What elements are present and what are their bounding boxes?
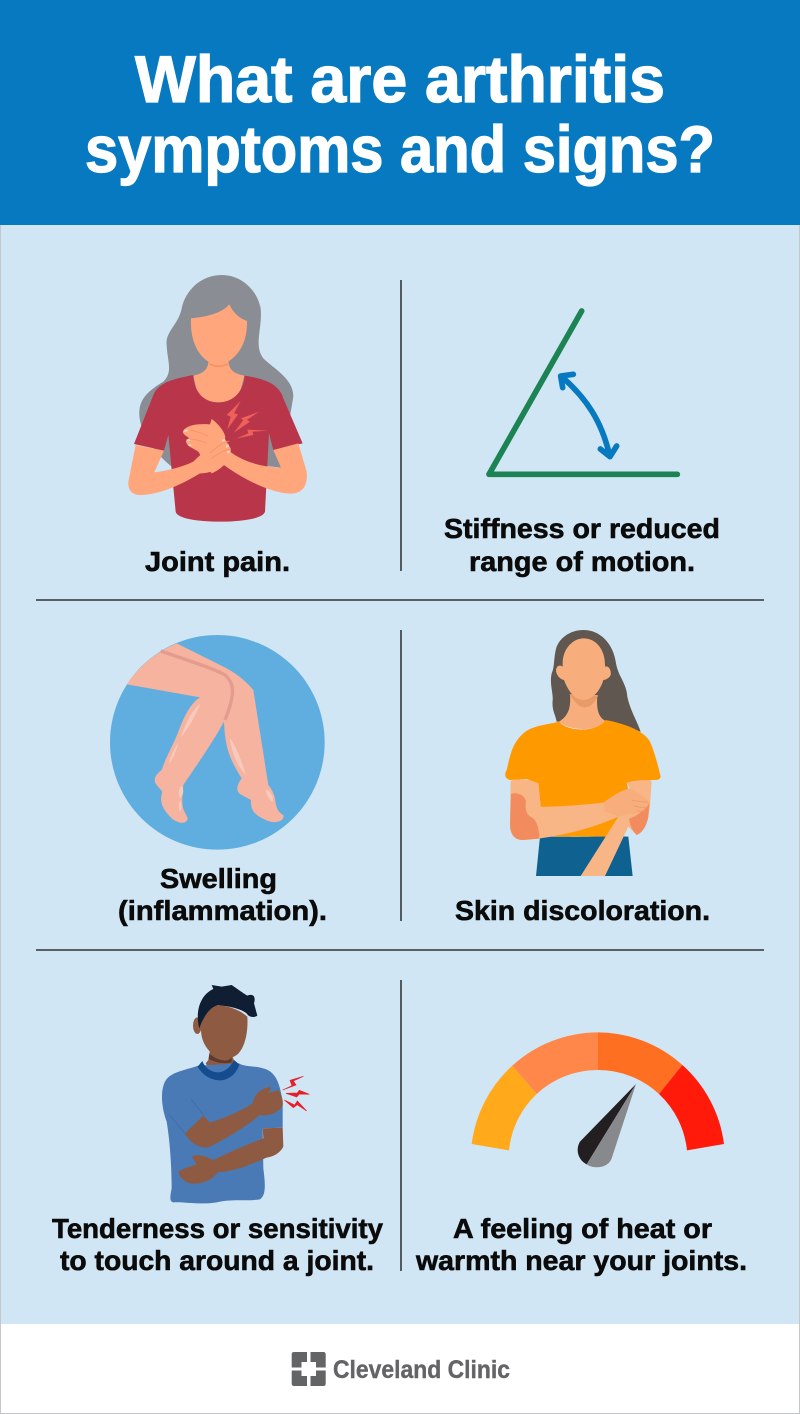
label: swelling: [118, 863, 327, 926]
gauge needle: [578, 1084, 636, 1167]
panel: tenderness: [52, 985, 384, 1276]
icon: man holding shoulder: [162, 985, 309, 1203]
logo wordmark: Cleveland Clinic: [333, 1356, 510, 1384]
header banner: [0, 0, 800, 225]
panel: heat: [415, 1032, 747, 1276]
title: symptoms and signs?: [85, 112, 715, 186]
icon: pain bolts: [283, 1076, 309, 1111]
label: stiffness: Stiffness or reduced: [444, 513, 720, 544]
label: stiffness: [444, 513, 720, 577]
panel: stiffness: [444, 311, 720, 577]
icon: swollen legs in circle: [110, 635, 325, 850]
label: stiffness: range of motion.: [469, 546, 695, 577]
label: swelling: (inflammation).: [118, 895, 327, 926]
icon: woman with skin patches: [505, 630, 661, 876]
label: heat: [415, 1213, 747, 1276]
label: skin discoloration: Skin discoloration.: [455, 895, 710, 926]
body panel background: [0, 225, 800, 1324]
title: What are arthritis: [135, 42, 665, 116]
footer logo: Cleveland Clinic: [292, 1352, 510, 1386]
title: [85, 42, 715, 186]
panel: joint pain: [128, 275, 307, 577]
label: heat: A feeling of heat or: [453, 1213, 712, 1244]
label: tenderness: Tenderness or sensitivity: [52, 1213, 384, 1244]
label: swelling: Swelling: [160, 863, 277, 894]
label: tenderness: [52, 1213, 384, 1276]
icon: woman holding chest: [128, 275, 307, 522]
label: tenderness: to touch around a joint.: [60, 1245, 374, 1276]
panel: swelling: [110, 635, 327, 926]
panel: skin discoloration: [455, 630, 710, 926]
icon: heat gauge: [472, 1032, 724, 1167]
icon: logo cross: [292, 1352, 326, 1386]
icon: angle with arrow: [489, 311, 677, 474]
label: heat: warmth near your joints.: [415, 1245, 747, 1276]
label: joint pain: Joint pain.: [145, 546, 290, 577]
icon: pain bolts: [227, 401, 267, 439]
